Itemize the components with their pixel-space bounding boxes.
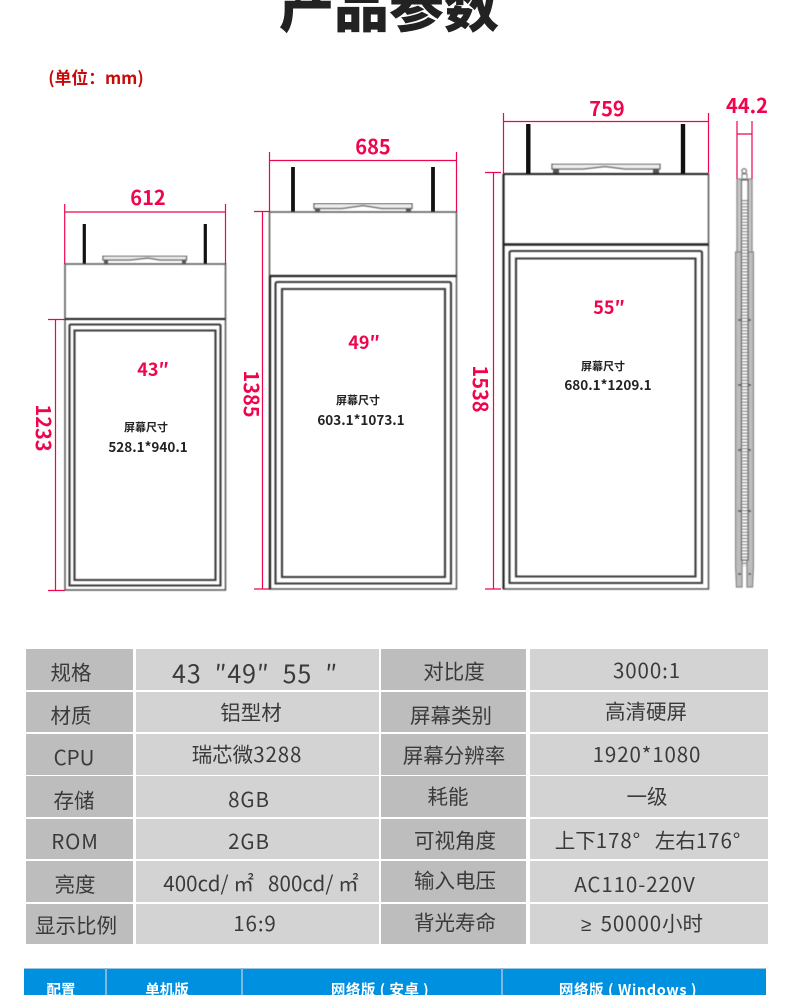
hanging rods: [528, 124, 683, 174]
row labels left: 存储: [54, 784, 94, 814]
mounting bracket: [314, 204, 412, 212]
width dimension 685: 685: [355, 131, 391, 160]
row values left: 43 ″49″ 55 ″: [172, 655, 338, 691]
height dimension 1385: 1385: [238, 370, 267, 418]
row labels left: 规格: [50, 656, 92, 686]
row labels right: 背光寿命: [414, 906, 496, 936]
row labels right: 输入电压: [414, 864, 496, 894]
screen size 55: 680.1*1209.1: [564, 374, 652, 394]
width dimension 612: [65, 182, 226, 264]
mounting bracket: [103, 256, 186, 264]
size label 43: 43″: [137, 356, 169, 382]
depth dimension 44.2: [726, 90, 768, 179]
depth dimension 44.2: 44.2: [726, 90, 768, 119]
screen size 55: [564, 358, 652, 394]
row values left: 瑞芯微3288: [192, 738, 302, 768]
size label 55: 55″: [593, 294, 625, 320]
cabinet body: [503, 174, 708, 589]
row values left: 铝型材: [220, 696, 282, 726]
height dimension 1538: 1538: [467, 365, 496, 413]
screen size 55: 屏幕尺寸: [581, 358, 625, 374]
row labels right: 屏幕分辨率: [403, 739, 505, 769]
screen size 43: [108, 419, 188, 456]
side profile: [736, 169, 754, 587]
row values left: 2GB: [228, 825, 270, 855]
unit note: (单位：mm): [48, 65, 144, 89]
diagram: 43 inch: [30, 182, 226, 590]
size label 49: 49″: [348, 329, 380, 355]
cabinet body: [270, 212, 456, 589]
screen size 43: 屏幕尺寸: [124, 419, 168, 435]
row labels left: ROM: [51, 825, 99, 855]
diagram: side view: [726, 90, 768, 587]
diagram: 49 inch: [238, 131, 456, 589]
screen frame: [276, 282, 451, 584]
configuration table header: [24, 968, 766, 995]
spec table: [26, 649, 768, 944]
row values left: 16:9: [233, 907, 277, 937]
width dimension 759: 759: [589, 93, 625, 122]
width dimension 685: [270, 131, 456, 212]
row values right: 1920*1080: [593, 738, 701, 768]
screen size 49: 603.1*1073.1: [317, 409, 405, 429]
row values right: 高清硬屏: [605, 695, 687, 725]
row labels left: 显示比例: [35, 909, 117, 939]
hanging rods: [84, 224, 205, 264]
row values left: 8GB: [228, 783, 270, 813]
mounting bracket: [552, 164, 660, 174]
row values left: [163, 655, 359, 937]
row labels right: 屏幕类别: [410, 699, 492, 729]
row values right: 上下178° 左右176°: [555, 824, 741, 854]
row labels left: [35, 656, 117, 939]
cabinet body: [65, 264, 226, 590]
height dimension 1233: 1233: [30, 404, 59, 452]
row values right: 3000:1: [613, 654, 681, 684]
width dimension 612: 612: [130, 182, 166, 211]
screen size 43: 528.1*940.1: [108, 436, 188, 456]
table cell backgrounds: [26, 649, 768, 944]
row labels right: 可视角度: [414, 824, 496, 854]
row labels left: 亮度: [54, 868, 96, 898]
row values right: [555, 654, 741, 937]
screen frame: [510, 251, 702, 583]
screen size 49: 屏幕尺寸: [336, 392, 380, 408]
height dimension 1233: [30, 320, 65, 590]
width dimension 759: [504, 93, 708, 173]
row values left: 400cd/ ㎡ 800cd/ ㎡: [163, 867, 359, 897]
screen frame: [70, 324, 220, 586]
hanging rods: [293, 167, 433, 212]
height dimension 1385: [238, 212, 270, 589]
row values right: ≥ 50000小时: [581, 907, 703, 937]
height dimension 1538: [467, 172, 501, 589]
row labels left: 材质: [50, 699, 92, 729]
row labels left: CPU: [54, 741, 94, 771]
row values right: AC110-220V: [574, 868, 696, 898]
row labels right: 对比度: [423, 655, 485, 685]
diagram: 55 inch: [467, 93, 708, 589]
row values right: 一级: [626, 780, 668, 810]
row labels right: [403, 655, 505, 936]
screen size 49: [317, 392, 405, 429]
row labels right: 耗能: [428, 780, 468, 810]
